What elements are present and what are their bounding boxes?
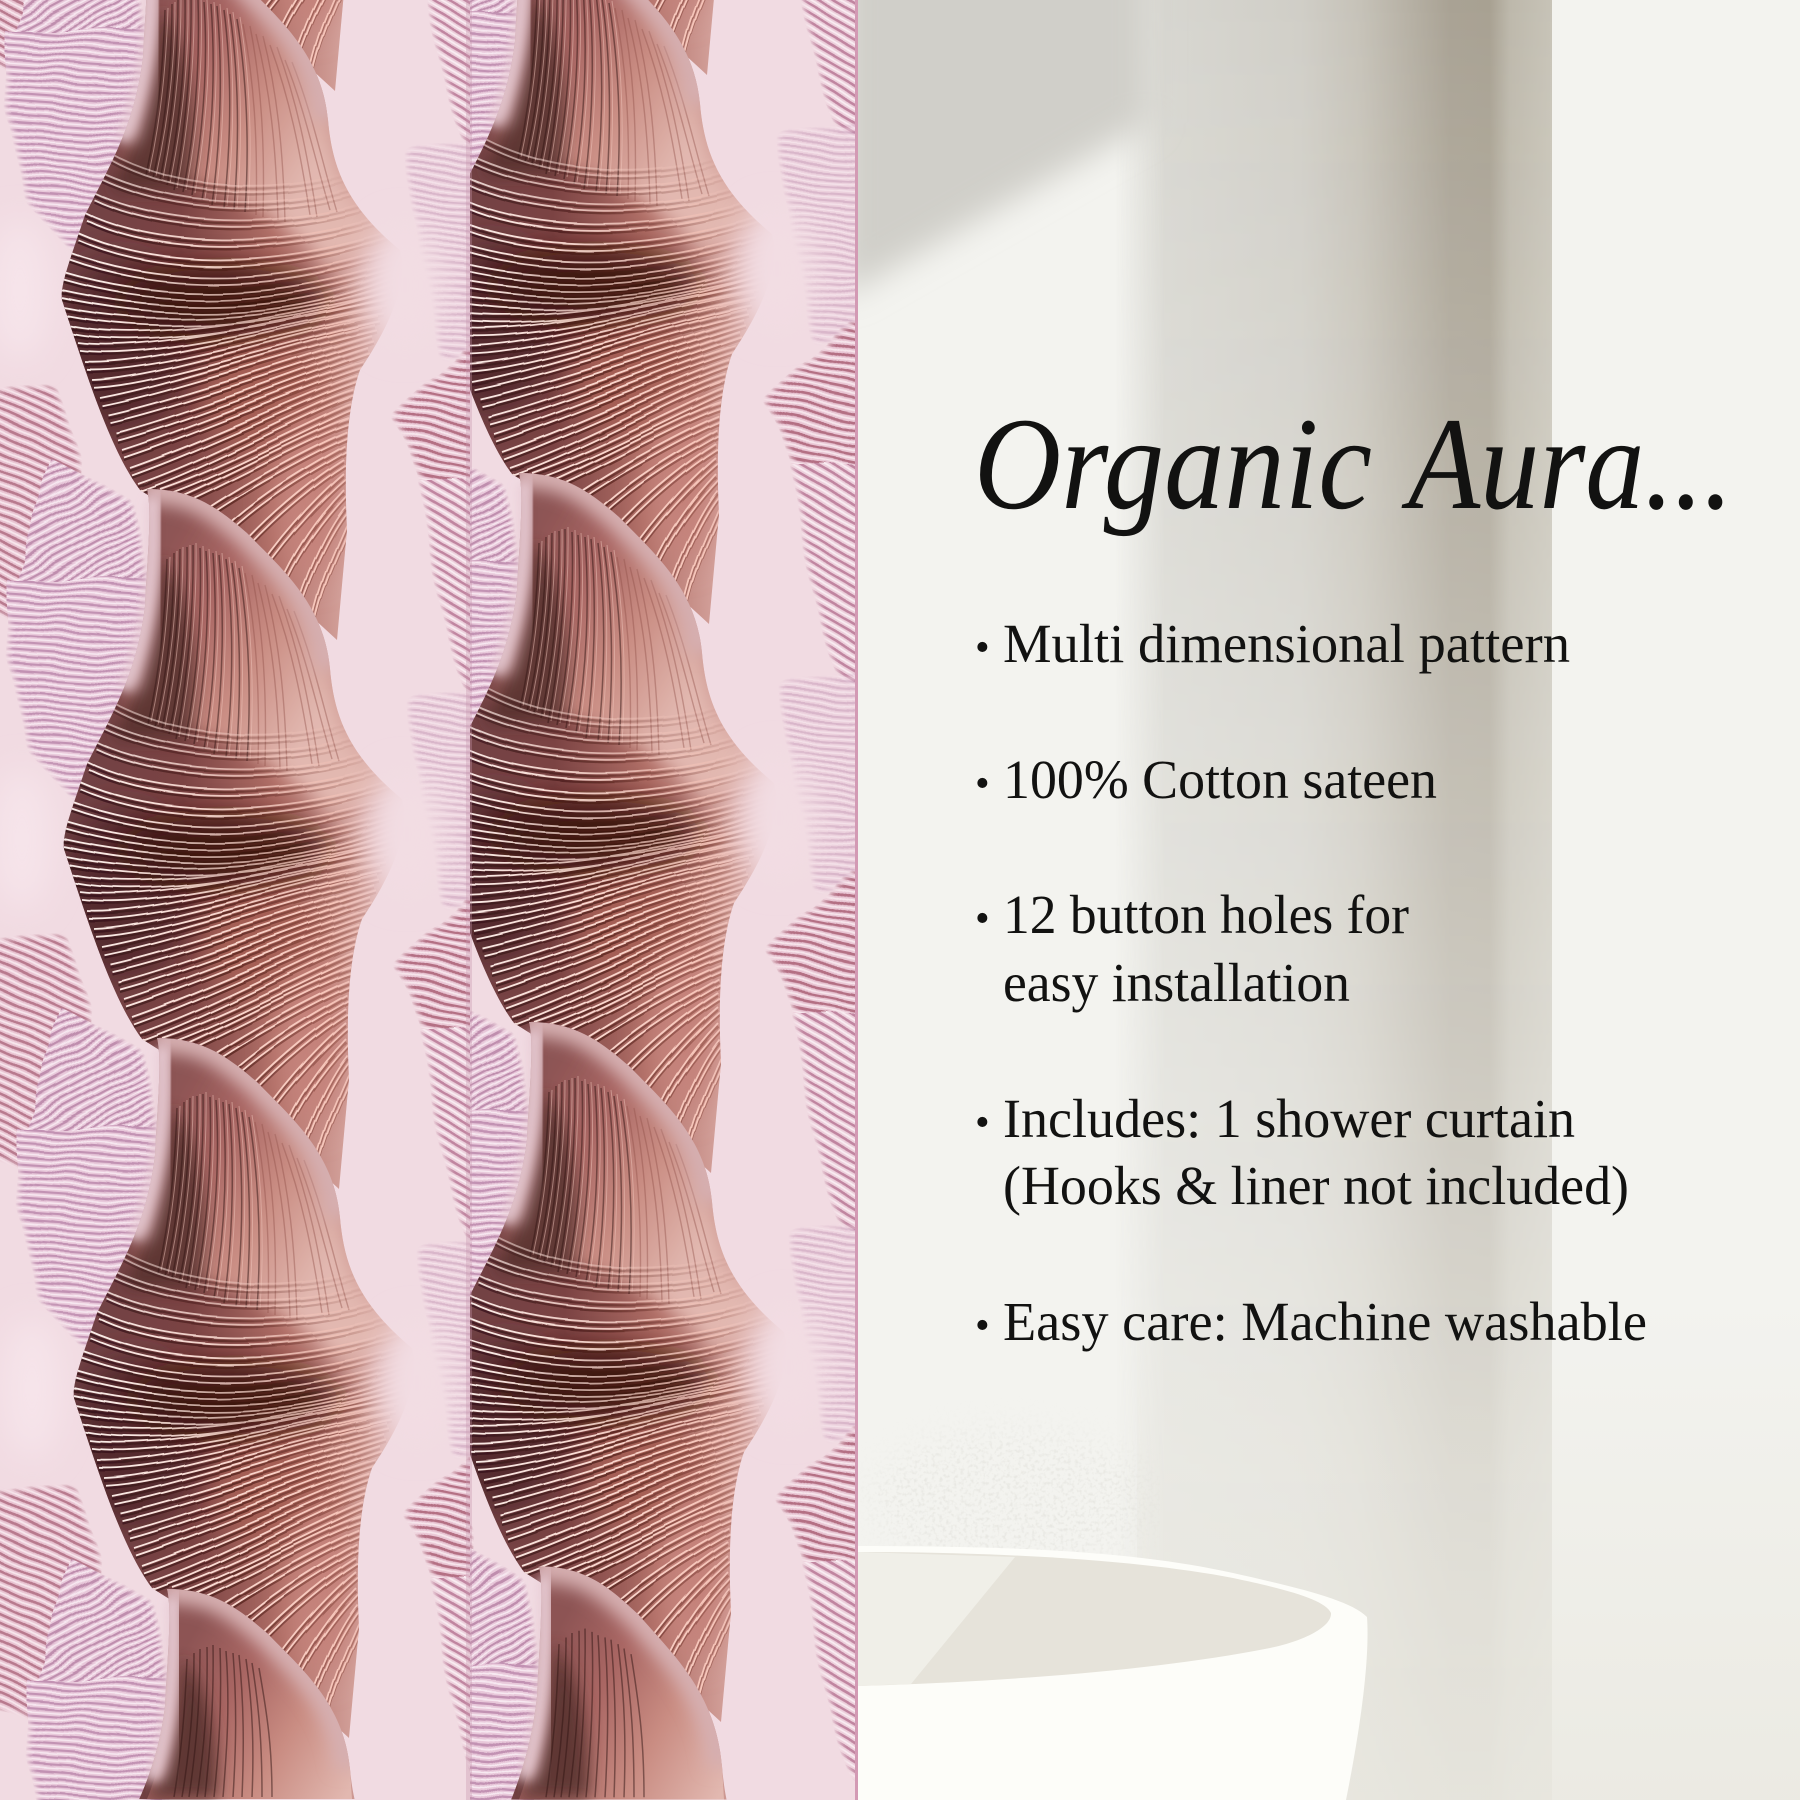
bullet: includes: (Hooks & liner not included) bbox=[1003, 1155, 1629, 1216]
bullet: easy care: Easy care: Machine washable bbox=[1003, 1291, 1647, 1352]
bullet: cotton sateen: 100% Cotton sateen bbox=[1003, 749, 1437, 810]
wall background with window light bbox=[840, 0, 1800, 1800]
bowl bbox=[858, 1546, 1368, 1800]
curtain panel left bbox=[0, 0, 470, 1800]
title: Organic bbox=[974, 390, 1372, 537]
bullet: easy care: • bbox=[975, 1303, 990, 1349]
title: Aura... bbox=[1401, 390, 1733, 537]
bullet: button holes: easy installation bbox=[1003, 952, 1350, 1013]
bullet: button holes: 12 button holes for bbox=[1003, 884, 1409, 945]
bullet: multi dimensional pattern: • bbox=[975, 625, 990, 671]
feature list bbox=[975, 613, 1647, 1352]
bullet: includes: Includes: 1 shower curtain bbox=[1003, 1088, 1575, 1149]
bullet: includes bbox=[975, 1088, 1629, 1216]
bullet: button holes bbox=[975, 884, 1409, 1013]
title bbox=[974, 390, 1733, 537]
bullet: multi dimensional pattern: Multi dimensional pattern bbox=[1003, 613, 1570, 674]
bullet: includes: • bbox=[975, 1100, 990, 1146]
bullet: button holes: • bbox=[975, 896, 990, 942]
bullet: cotton sateen: • bbox=[975, 761, 990, 807]
curtain panel right bbox=[340, 0, 904, 1800]
curtain bbox=[0, 0, 904, 1800]
